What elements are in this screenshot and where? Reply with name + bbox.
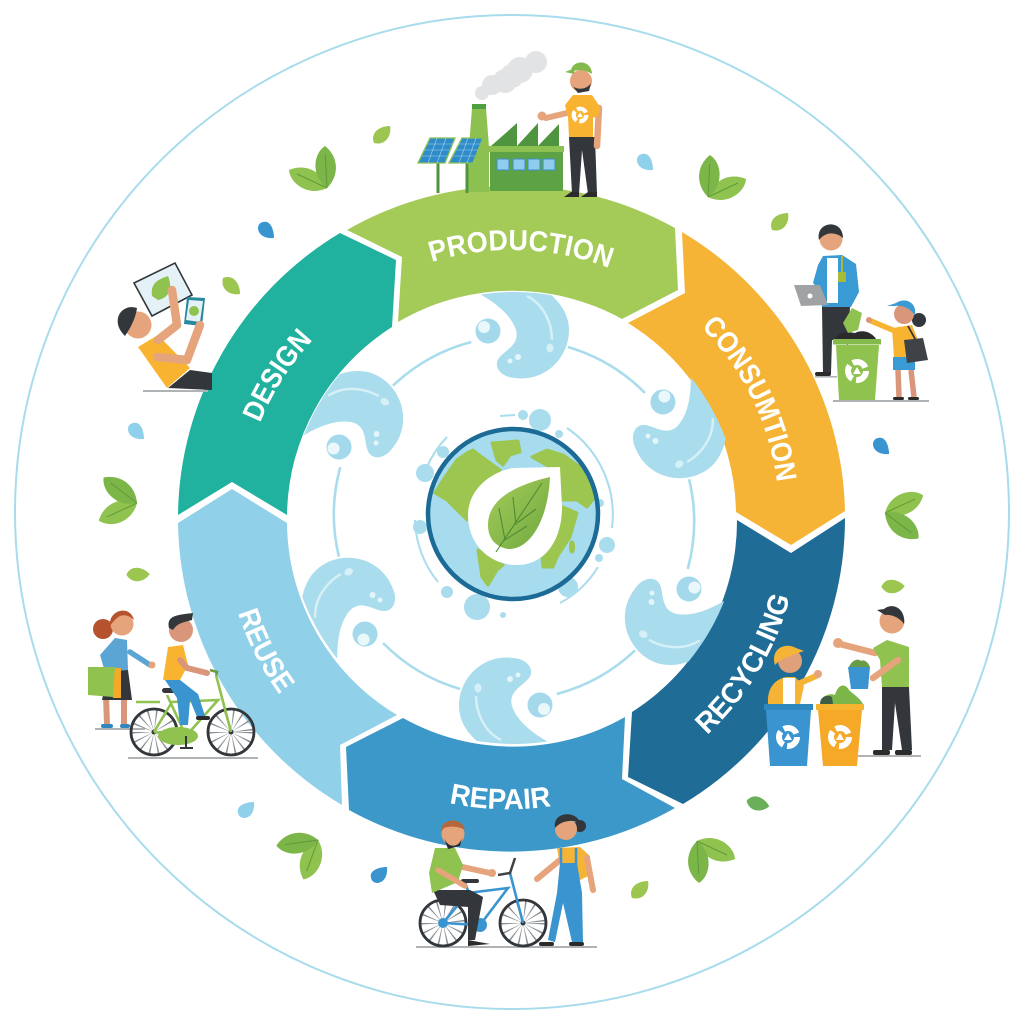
decorative water drops [128,154,889,883]
scene: design person with tablets [118,263,212,392]
child with bag [833,300,929,402]
adult with laptop [794,224,859,378]
cyclist [163,613,210,725]
label: design: DESIGN [242,328,312,422]
bubbles and arcs around globe [413,409,615,620]
scene: reuse cyclist and shopper [88,611,258,759]
child in bin [768,646,822,704]
label: reuse: REUSE [238,608,296,694]
solar panels [418,138,483,193]
green leaf [488,477,550,549]
person [118,290,212,390]
segment: consumption [628,232,845,545]
water waves ring [302,292,726,744]
bearded man [429,820,496,946]
scene: repair bike and mechanics [416,814,597,948]
shopper [88,611,156,730]
decorative leaves [79,126,943,899]
bicycle [128,670,258,759]
orange bin [816,686,864,766]
large tablet [134,263,192,316]
smoke [475,51,547,100]
segment: design [178,233,396,515]
blue bin [764,704,813,766]
label: consumption: CONSUMTION [705,317,796,481]
factory building [488,123,564,191]
segment: reuse [178,489,397,805]
scene: consumption person and child [794,224,929,402]
central globe with leaf [428,429,598,599]
green recycling bin [833,308,881,400]
segment: recycling [628,518,845,804]
ground [416,946,597,948]
scene: production factory and worker [418,51,600,197]
bicycle [420,858,546,946]
label: production: PRODUCTION [428,230,614,268]
segment: production [347,186,678,322]
small tablet [184,297,205,326]
scene: recycling bins and people [764,606,921,766]
adult with pot [833,606,921,757]
label: recycling: RECYCLING [694,594,788,734]
worker [538,62,600,197]
cycle ring [178,186,845,852]
segment: repair [346,717,675,852]
chimney [468,108,489,192]
label: repair: REPAIR [450,784,551,810]
white leaf drop [468,467,562,565]
woman in overalls [537,814,593,946]
